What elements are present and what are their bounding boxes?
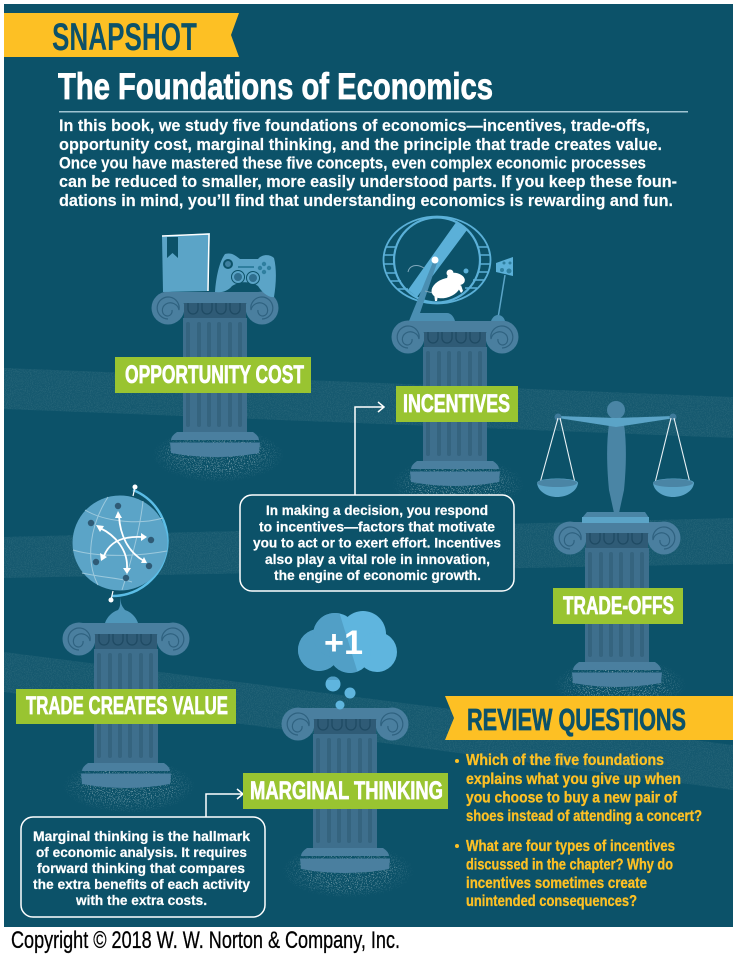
intro text: can be reduced to smaller, more easily understood parts. If you keep these foun- [59,173,677,191]
column shadows [63,428,686,898]
label: marginal thinking [243,773,448,809]
review question 1: you choose to buy a new pair of [466,790,678,806]
callout: marginal thinking: Marginal thinking is the hallmark [33,829,251,844]
intro text: dations in mind, you’ll find that understanding economics is rewarding and fun. [59,192,673,210]
review question 2 [455,838,675,910]
icon: hamster wheel [384,216,513,321]
column: marginal thinking [282,708,408,873]
column: opportunity cost [152,292,278,457]
callout: incentives: to incentives—factors that motivate [259,520,495,534]
callout connector: marginal thinking [206,789,243,817]
icon: globe [72,484,168,623]
icon: balance scale [537,401,694,523]
label: incentives: INCENTIVES [403,390,510,418]
intro text: In this book, we study five foundations of economics—incentives, trade-offs, [59,117,650,135]
label: incentives [396,386,518,422]
callout connector: incentives [355,402,384,495]
label: opportunity cost [115,357,311,393]
intro text [59,117,677,210]
callout: incentives: In making a decision, you respond [266,503,488,518]
column: trade creates value [62,622,190,788]
icon: thought cloud: +1 [324,624,363,662]
title: The Foundations of Economics [58,66,493,107]
callout: incentives: you to act or to exert effort. Incentives [253,536,501,550]
background band: lower [4,652,733,790]
label: opportunity cost: OPPORTUNITY COST [125,361,304,389]
callout: incentives: also play a vital role in innovation, [265,552,490,567]
column: incentives [392,320,518,486]
callout: marginal thinking: forward thinking that compares [37,861,245,876]
review question 1: Which of the five foundations [466,752,664,769]
callout: marginal thinking: the extra benefits of each activity [33,877,250,892]
icon: thought cloud [298,611,397,710]
column: trade-offs [554,522,680,687]
banner: snapshot [4,13,239,59]
review question 2: What are four types of incentives [466,838,675,855]
review question 1 [455,752,702,825]
review question 2: incentives sometimes create [466,875,647,892]
callout: marginal thinking: of economic analysis. It requires [36,845,247,860]
intro text: Once you have mastered these five concepts, even complex economic processes [59,154,646,172]
icon: cheese on a stick [491,257,513,321]
review question 2: discussed in the chapter? Why do [466,856,673,874]
callout: incentives [240,495,514,591]
icon: book [162,233,210,292]
background band: upper [4,368,733,438]
icon: game controller [215,253,276,297]
background band: middle [4,518,733,578]
intro text: opportunity cost, marginal thinking, and the principle that trade creates value. [59,136,662,154]
label: trade creates value: TRADE CREATES VALUE [26,692,228,720]
review question 1: explains what you give up when [466,771,681,788]
callout: marginal thinking [21,817,265,917]
label: trade-offs [553,588,683,624]
copyright: Copyright © 2018 W. W. Norton & Company, Inc. [11,927,400,954]
label: trade-offs: TRADE-OFFS [563,592,674,620]
label: trade creates value [16,689,236,724]
callout: marginal thinking: with the extra costs. [75,893,207,908]
callout: incentives: the engine of economic growth. [274,568,481,583]
review question 2: unintended consequences? [466,893,637,910]
label: marginal thinking: MARGINAL THINKING [250,777,443,805]
banner: snapshot: SNAPSHOT [52,16,197,59]
